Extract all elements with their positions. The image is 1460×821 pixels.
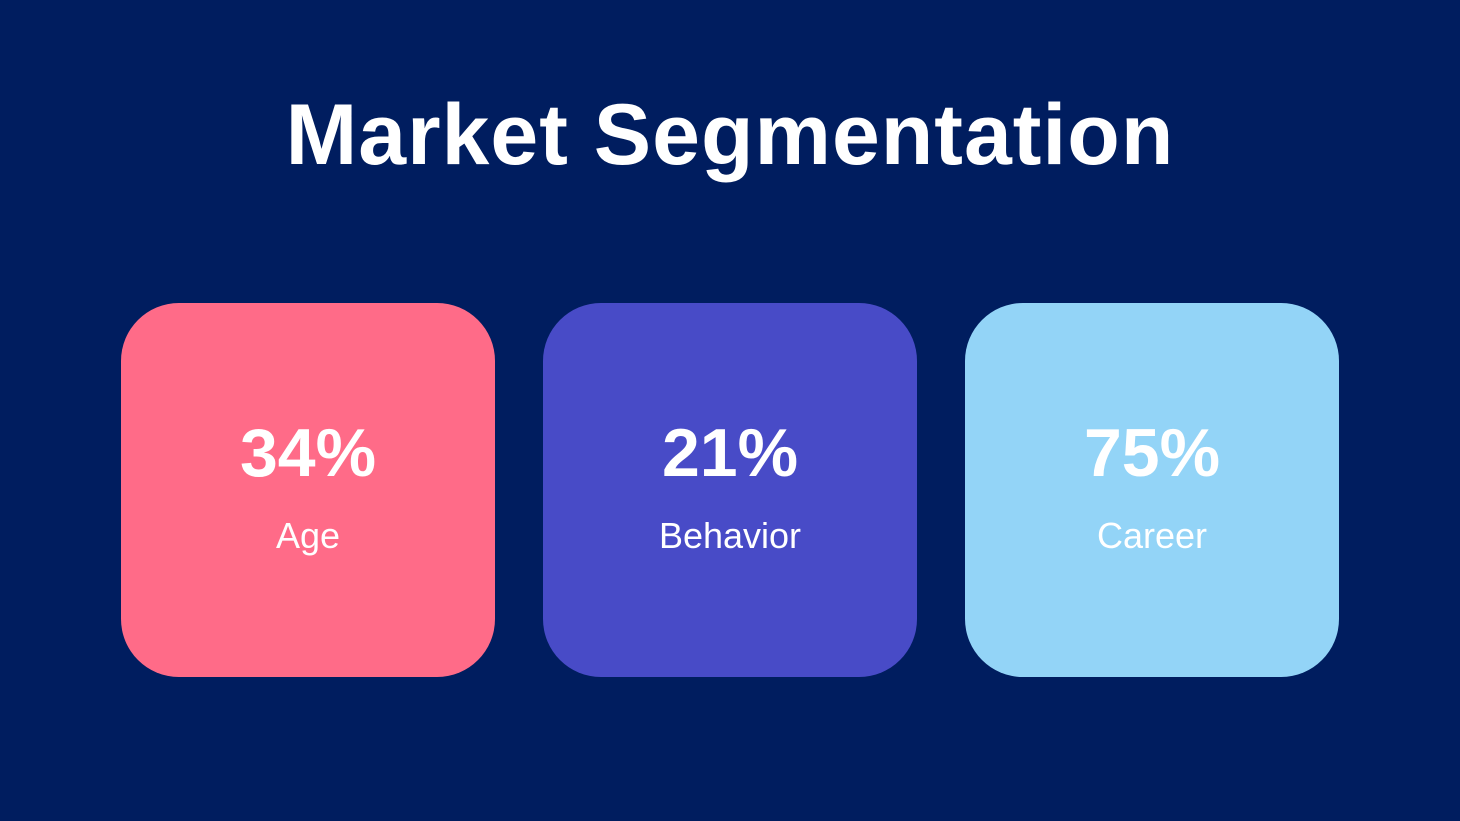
label: Behavior: Behavior — [659, 515, 801, 556]
panel: career — [965, 303, 1339, 677]
percentage: 75%: 75% — [1084, 415, 1220, 491]
panel: behavior — [543, 303, 917, 677]
label: Career: Career — [1097, 515, 1207, 556]
title: Market Segmentation — [286, 87, 1174, 183]
percentage: 21%: 21% — [662, 415, 798, 491]
label: Age: Age — [276, 515, 340, 556]
panel: age — [121, 303, 495, 677]
percentage: 34%: 34% — [240, 415, 376, 491]
